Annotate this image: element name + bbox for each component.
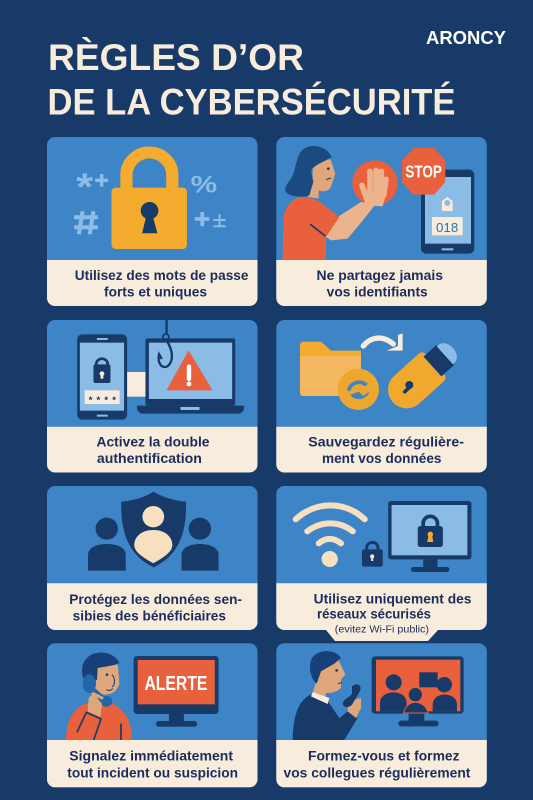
title: RÈGLES D’OR: [48, 37, 304, 78]
caption: vos collegues régulièrement: [284, 766, 471, 781]
icon: phone, laptop, hook and warning: ****: [89, 394, 116, 405]
caption: Formez-vous et formez: [308, 749, 460, 764]
icon: man on the phone: [66, 653, 132, 740]
caption: [69, 592, 242, 624]
caption: (evitez Wi-Fi public): [335, 624, 429, 636]
icon: padlock and symbols: [74, 152, 226, 249]
caption: Sauvegardez régulière-: [308, 435, 464, 450]
title: [48, 37, 456, 122]
panel: sauvegarde: [276, 320, 487, 472]
caption: réseaux sécurisés: [317, 606, 431, 622]
panel: identifiants: [276, 137, 487, 306]
panel: réseaux sécurisés: [276, 486, 487, 641]
caption: Utilisez uniquement des: [314, 592, 472, 606]
icon: folder, arrow and USB key: [300, 333, 465, 416]
caption: [284, 749, 471, 781]
icon: wifi, padlock and monitor: [296, 501, 471, 572]
caption: forts et uniques: [104, 285, 207, 300]
icon: phone, laptop, hook and warning: [77, 320, 244, 420]
icon: alert monitor: [134, 656, 219, 727]
panel: données sensibles: [47, 486, 258, 630]
caption: [96, 435, 210, 466]
caption: Signalez immédiatement: [69, 749, 233, 764]
caption: authentification: [97, 451, 202, 466]
icon: shield and people: [88, 492, 219, 571]
icon: woman, stop sign and phone: STOP: [405, 162, 442, 182]
title: DE LA CYBERSÉCURITÉ: [48, 80, 456, 122]
icon: alert monitor: ALERTE: [144, 672, 207, 695]
caption: Utilisez des mots de passe: [75, 268, 249, 283]
icon: trainer and training monitor: [293, 651, 464, 740]
caption: vos identifiants: [327, 285, 428, 300]
caption: [67, 749, 238, 781]
caption: Activez la double: [96, 435, 210, 450]
caption: [308, 435, 464, 466]
panel: formation: [276, 643, 487, 787]
icon: woman, stop sign and phone: [283, 146, 474, 260]
icon: padlock and symbols: *: [76, 166, 94, 208]
caption: [316, 268, 443, 300]
panel: double authentification: [47, 320, 258, 472]
caption: [75, 268, 249, 300]
logo: Aroncy: ARONCY: [426, 27, 507, 48]
icon: woman, stop sign and phone: 018: [436, 221, 458, 235]
caption: sibies des bénéficiaires: [73, 609, 226, 624]
caption: Ne partagez jamais: [316, 268, 443, 283]
caption: [314, 592, 472, 636]
caption: tout incident ou suspicion: [67, 766, 238, 781]
panel: mots de passe: [47, 137, 258, 306]
icon: padlock and symbols: %: [191, 172, 217, 198]
panel: signaler un incident: [47, 643, 258, 787]
caption: ment vos données: [322, 451, 442, 466]
caption: Protégez les données sen-: [69, 592, 242, 607]
